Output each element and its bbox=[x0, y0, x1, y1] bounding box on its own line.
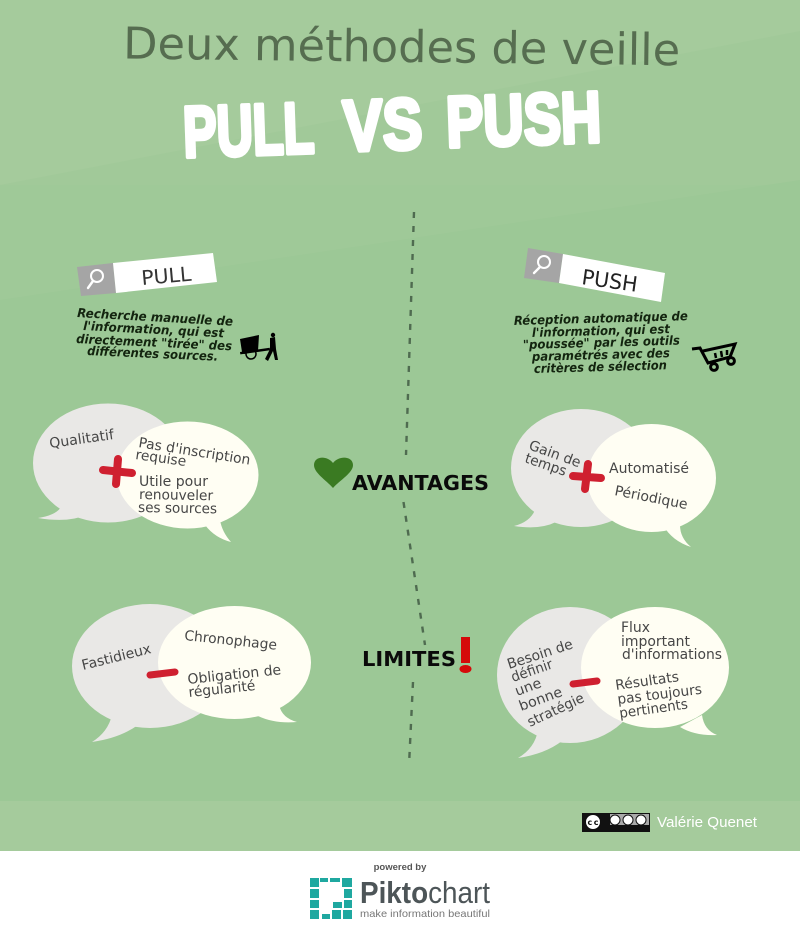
bubble: Chronophage bbox=[158, 606, 311, 722]
description: pull: Recherche manuelle de bbox=[77, 305, 233, 329]
speech bubbles: push limits bbox=[497, 607, 729, 758]
bubble: Gain de temps: temps bbox=[523, 451, 569, 480]
icon: person pulling cart bbox=[240, 333, 278, 361]
description: pull: directement "tirée" des bbox=[76, 331, 232, 353]
description: pull: différentes sources. bbox=[87, 343, 218, 364]
search bar: PULL bbox=[77, 253, 217, 296]
description: push: Réception automatique de bbox=[514, 308, 688, 328]
description: push: "poussée" par les outils bbox=[523, 333, 680, 352]
bubble: Chronophage: régularité bbox=[188, 678, 256, 701]
bubble: Gain de temps bbox=[511, 409, 651, 527]
bubble: Besoin de définir: bonne bbox=[517, 684, 565, 715]
bubble: Automatisé: Périodique bbox=[613, 483, 689, 513]
bubble: Besoin de définir: définir bbox=[509, 657, 555, 686]
speech bubbles: pull limits bbox=[72, 604, 311, 742]
label: AVANTAGES with heart: AVANTAGES bbox=[352, 471, 489, 495]
label: LIMITES with exclamation mark bbox=[362, 637, 472, 673]
bubble: Pas d'inscription: Pas d'inscription bbox=[137, 435, 251, 469]
label: AVANTAGES with heart bbox=[314, 458, 489, 495]
bubble: Flux important: pertinents bbox=[618, 697, 689, 722]
dashed divider bbox=[404, 212, 425, 765]
bubble: Pas d'inscription: requise bbox=[134, 447, 187, 470]
badge: creative commons bbox=[582, 813, 650, 832]
bubble: Automatisé bbox=[587, 424, 716, 547]
icon: shopping cart bbox=[692, 344, 735, 370]
description: push: critères de sélection bbox=[534, 357, 667, 376]
heading: PULL VS PUSH bbox=[182, 78, 602, 173]
bubble: Chronophage: Obligation de bbox=[187, 662, 282, 688]
title: Deux méthodes de veille: Deux méthodes de veille bbox=[123, 19, 680, 76]
bubble: Pas d'inscription: Utile pour bbox=[139, 474, 208, 490]
bubble: Qualitatif bbox=[33, 404, 183, 522]
bubble: Flux important: important bbox=[621, 634, 691, 650]
logo: Piktochart wordmark: make information beautiful bbox=[360, 908, 490, 920]
bubble: Besoin de définir: stratégie bbox=[525, 690, 587, 731]
bubble: Fastidieux bbox=[72, 604, 228, 742]
heading: PULL VS PUSH: VS bbox=[342, 84, 424, 167]
description: pull: l'information, qui est bbox=[83, 318, 225, 340]
bubble: Pas d'inscription: renouveler bbox=[139, 487, 213, 504]
description: pull bbox=[76, 305, 233, 364]
description: push: paramétrés avec des bbox=[531, 345, 670, 364]
search bar: PULL: PULL bbox=[140, 262, 193, 290]
icon: minus bbox=[573, 681, 597, 684]
bubble: Flux important: pas toujours bbox=[617, 682, 703, 708]
label: LIMITES with exclamation mark: LIMITES bbox=[362, 647, 456, 671]
logo: piktochart mark bbox=[310, 878, 352, 919]
icon: minus bbox=[150, 672, 175, 675]
bubble: Pas d'inscription bbox=[116, 422, 258, 542]
description: push: l'information, qui est bbox=[532, 321, 671, 340]
icon: plus bbox=[103, 459, 132, 484]
bubble: Flux important bbox=[581, 607, 729, 735]
badge: creative commons: cc bbox=[588, 818, 599, 827]
bubble: Flux important: Flux bbox=[621, 620, 650, 636]
speech bubbles: push advantages bbox=[511, 409, 716, 547]
search bar: PUSH: PUSH bbox=[580, 265, 639, 297]
bubble: Besoin de définir bbox=[497, 607, 643, 758]
author credit: Valérie Quenet bbox=[657, 814, 758, 831]
bubble: Flux important: d'informations bbox=[622, 647, 722, 663]
speech bubbles: pull advantages bbox=[33, 404, 258, 542]
heading: PULL VS PUSH: PULL bbox=[182, 88, 315, 173]
bubble: Qualitatif: Qualitatif bbox=[48, 427, 116, 452]
bubble: Besoin de définir: Besoin de bbox=[505, 637, 575, 673]
logo: Piktochart wordmark: Piktochart bbox=[360, 875, 490, 910]
heading: PULL VS PUSH: PUSH bbox=[445, 78, 602, 163]
description: push bbox=[514, 308, 688, 376]
bubble: Besoin de définir: une bbox=[513, 675, 544, 700]
bubble: Fastidieux: Fastidieux bbox=[80, 641, 153, 674]
bubble: Flux important: Résultats bbox=[614, 669, 680, 694]
search bar: PUSH bbox=[524, 248, 665, 302]
bubble: Pas d'inscription: ses sources bbox=[138, 500, 217, 517]
bubble: Gain de temps: Gain de bbox=[527, 438, 583, 471]
icon: plus bbox=[573, 464, 601, 489]
bubble: Automatisé: Automatisé bbox=[609, 461, 689, 477]
footer: powered by: powered by bbox=[374, 862, 427, 873]
bubble: Chronophage: Chronophage bbox=[184, 628, 278, 654]
